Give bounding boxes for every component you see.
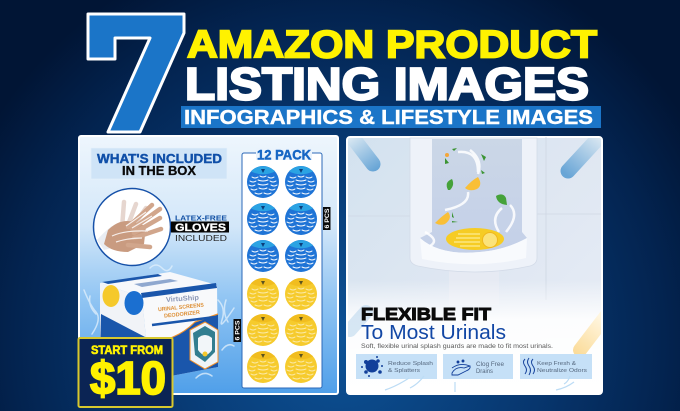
label: 6 pcs blue: 6 PCS [324, 208, 331, 228]
yellow discs [247, 278, 317, 383]
title line: Amazon Product: AMAZON PRODUCT [187, 24, 598, 66]
feature: keep fresh [520, 354, 592, 379]
yellow pill [580, 316, 606, 350]
text: latex-free gloves included [171, 214, 229, 243]
title line: Listing Images: LISTING IMAGES [185, 58, 589, 110]
heading: what's included in the box: IN THE BOX [122, 164, 197, 178]
text: latex-free gloves included: INCLUDED [175, 233, 227, 243]
price badge: START FROM [91, 345, 163, 357]
feature: keep fresh: Keep Fresh & [537, 361, 576, 367]
faint blue pill [350, 312, 366, 330]
text: latex-free gloves included: GLOVES [175, 222, 226, 234]
panel: what's included [79, 136, 338, 394]
urinal [410, 138, 537, 305]
icon: hand and drops [452, 360, 470, 375]
feature: clog free [443, 354, 513, 379]
heading: what's included in the box: WHAT'S INCLUDED [97, 152, 222, 166]
water splash decoration [385, 376, 574, 392]
blue discs [247, 166, 317, 272]
lemon and mint splash [425, 148, 514, 246]
icon: splash [361, 356, 383, 377]
heading: flexible fit: FLEXIBLE FIT [361, 304, 491, 324]
title [181, 24, 601, 129]
white fade [348, 280, 601, 393]
box label [152, 295, 215, 325]
panel: 12 pack [234, 146, 331, 388]
big number 7 [88, 14, 184, 132]
heading: to most urinals: To Most Urinals [361, 322, 506, 344]
feature: reduce splash: & Splatters [388, 368, 420, 374]
water splash decoration [84, 265, 234, 378]
box label: URINAL SCREENS [158, 302, 204, 313]
box label: VirtuShip [166, 295, 199, 304]
feature: clog free: Drains [476, 369, 493, 375]
blue pill left [350, 134, 373, 164]
text: latex-free gloves included: LATEX-FREE [175, 214, 227, 222]
price badge: $10 [90, 352, 166, 404]
icon: odor waves [524, 358, 534, 375]
feature: keep fresh: Neutralize Odors [537, 368, 587, 374]
wall tile lines [348, 137, 601, 300]
feature: reduce splash: Reduce Splash [388, 361, 433, 367]
panel: flexible fit [347, 132, 606, 394]
description: Soft, flexible urinal splash guards are made to fit most urinals. [361, 343, 553, 350]
subtitle banner: INFOGRAPHICS & LIFESTYLE IMAGES [184, 107, 593, 129]
icon: gloved hands [94, 188, 170, 266]
blue pill right [568, 132, 604, 171]
heading: 12 pack: 12 PACK [257, 146, 311, 162]
price badge [78, 338, 172, 407]
feature: clog free: Clog Free [476, 362, 505, 368]
heading: what's included in the box [91, 148, 227, 179]
product box [100, 272, 218, 380]
box label: DEODORIZER [164, 310, 200, 320]
label: 6 pcs yellow: 6 PCS [234, 320, 242, 340]
feature: reduce splash [356, 354, 437, 379]
yellow screen in urinal [446, 228, 504, 250]
